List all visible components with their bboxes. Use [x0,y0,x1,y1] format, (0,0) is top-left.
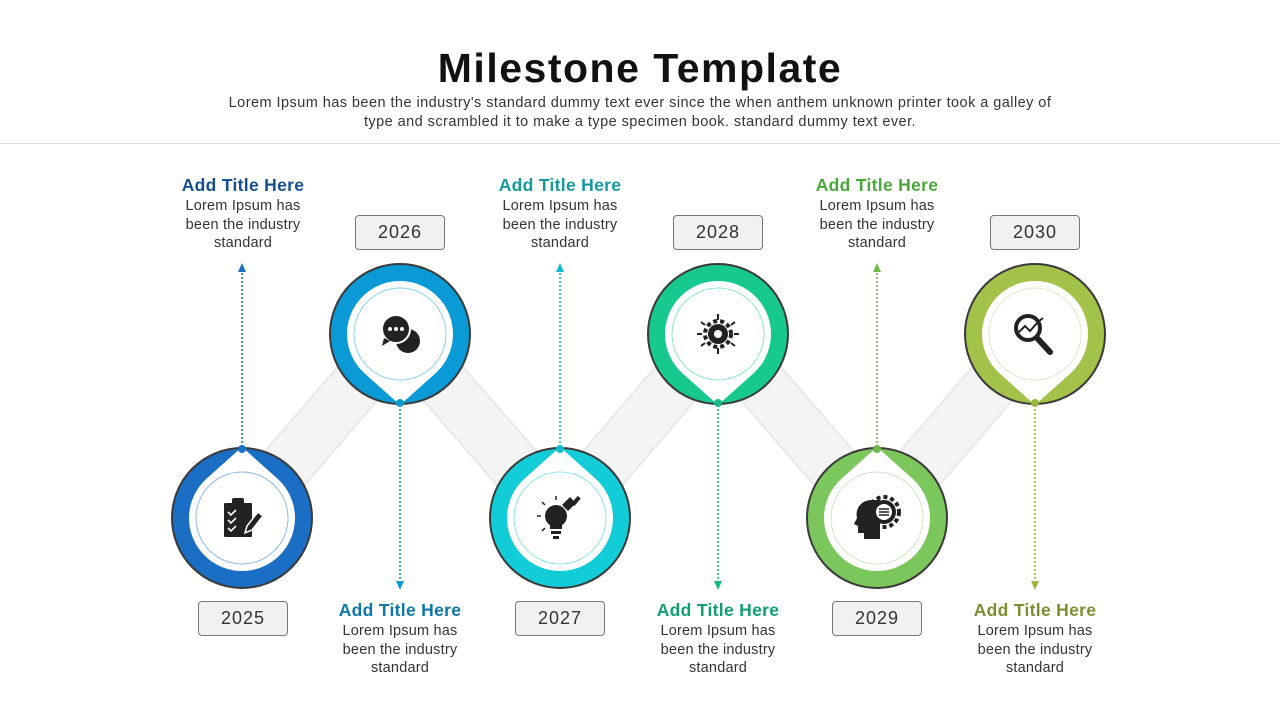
subtitle: Lorem Ipsum has been the industry's standard dummy text ever since the when anthem unknown printer took a galley of type and scrambled it to make a type specimen book. standard dummy text ever. [229,95,1051,130]
year label 2029 [832,601,922,636]
year label 2030 [990,215,1080,250]
text block 2030: Lorem Ipsum has been the industry standard [977,623,1093,676]
text block 2025 [182,175,304,251]
milestone 2027 pin [490,263,630,588]
text block 2029: Lorem Ipsum has been the industry standard [819,198,935,251]
text block 2028: Lorem Ipsum has been the industry standard [660,623,776,676]
icon: search chart [1016,316,1050,352]
icon: gear process [697,314,739,354]
icon: chat bubbles [382,315,420,353]
year label 2028 [673,215,763,250]
year label 2025 [198,601,288,636]
year label 2027 [515,601,605,636]
text block 2026: Add Title Here [339,600,461,620]
text block 2029: Add Title Here [816,175,938,195]
milestone 2025 pin [172,263,312,588]
text block 2026: Lorem Ipsum has been the industry standard [342,623,458,676]
text block 2025: Add Title Here [182,175,304,195]
text block 2028 [657,600,779,676]
year label 2026: 2026 [378,222,422,242]
year label 2028: 2028 [696,222,740,242]
year label 2026 [355,215,445,250]
icon: clipboard [224,498,263,537]
text block 2029 [816,175,938,251]
milestone 2030 pin [965,264,1105,590]
text block 2027: Add Title Here [499,175,621,195]
text block 2027: Lorem Ipsum has been the industry standard [502,198,618,251]
text block 2030: Add Title Here [974,600,1096,620]
year label 2029: 2029 [855,608,899,628]
text block 2025: Lorem Ipsum has been the industry standard [185,198,301,251]
year label 2027: 2027 [538,608,582,628]
text block 2026 [339,600,461,676]
title: Milestone Template [438,45,842,91]
icon: lightbulb puzzle [537,496,581,539]
milestone 2026 pin [330,264,470,590]
icon: head gear [854,497,899,539]
zigzag band [242,334,1035,518]
text block 2027 [499,175,621,251]
year label 2025: 2025 [221,608,265,628]
milestone 2029 pin [807,263,947,588]
year label 2030: 2030 [1013,222,1057,242]
text block 2028: Add Title Here [657,600,779,620]
milestone 2028 pin [648,264,788,590]
text block 2030 [974,600,1096,676]
